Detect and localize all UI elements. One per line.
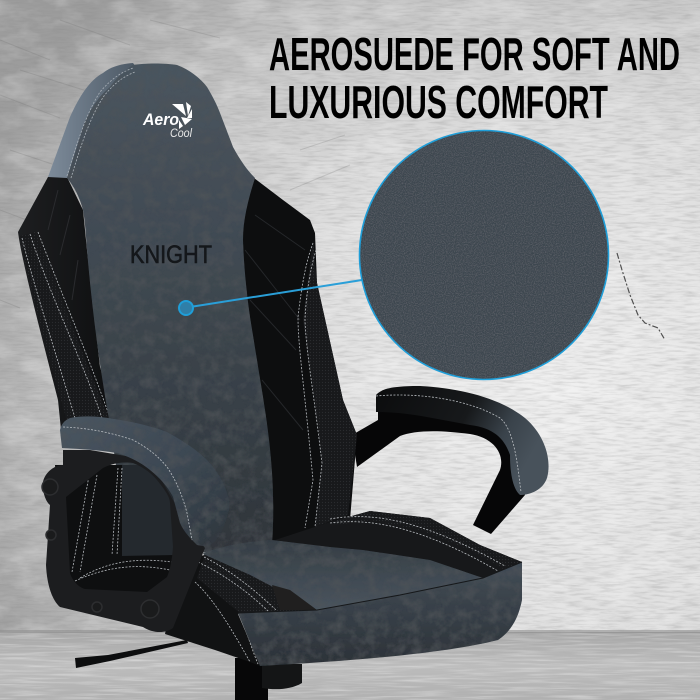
seat left side bbox=[165, 555, 317, 666]
dark opening behind left armrest bbox=[55, 465, 178, 600]
right armrest support bbox=[352, 400, 525, 534]
headrest stitching bbox=[67, 68, 135, 178]
backrest left bolster bbox=[18, 177, 125, 440]
logo wordmark Cool: Cool bbox=[170, 128, 192, 140]
logo wordmark Aero: Aero bbox=[142, 110, 179, 129]
seat bolster right bbox=[272, 511, 522, 580]
callout anchor dot bbox=[179, 301, 193, 315]
logo fan icon bbox=[172, 102, 192, 129]
suede center panel bbox=[67, 64, 273, 560]
title bbox=[269, 28, 680, 128]
callout: aerosuede swatch circle bbox=[360, 130, 608, 380]
seat front panel bbox=[238, 562, 522, 666]
wall crack bbox=[617, 253, 665, 340]
right armrest pad bbox=[376, 386, 549, 495]
chair bbox=[18, 63, 549, 700]
callout leader line bbox=[190, 280, 362, 307]
left armrest frame bbox=[42, 450, 205, 632]
seat suede top bbox=[203, 540, 483, 612]
left armrest pad bbox=[60, 416, 229, 546]
backrest right bolster bbox=[230, 175, 357, 545]
chair base: gas column and lever bbox=[75, 640, 302, 700]
frame bolts bbox=[42, 479, 159, 618]
headrest light side bbox=[48, 63, 140, 178]
logo: AeroCool bbox=[142, 102, 192, 140]
background: floor bbox=[0, 630, 700, 700]
KNIGHT emblem: KNIGHT bbox=[130, 241, 212, 269]
